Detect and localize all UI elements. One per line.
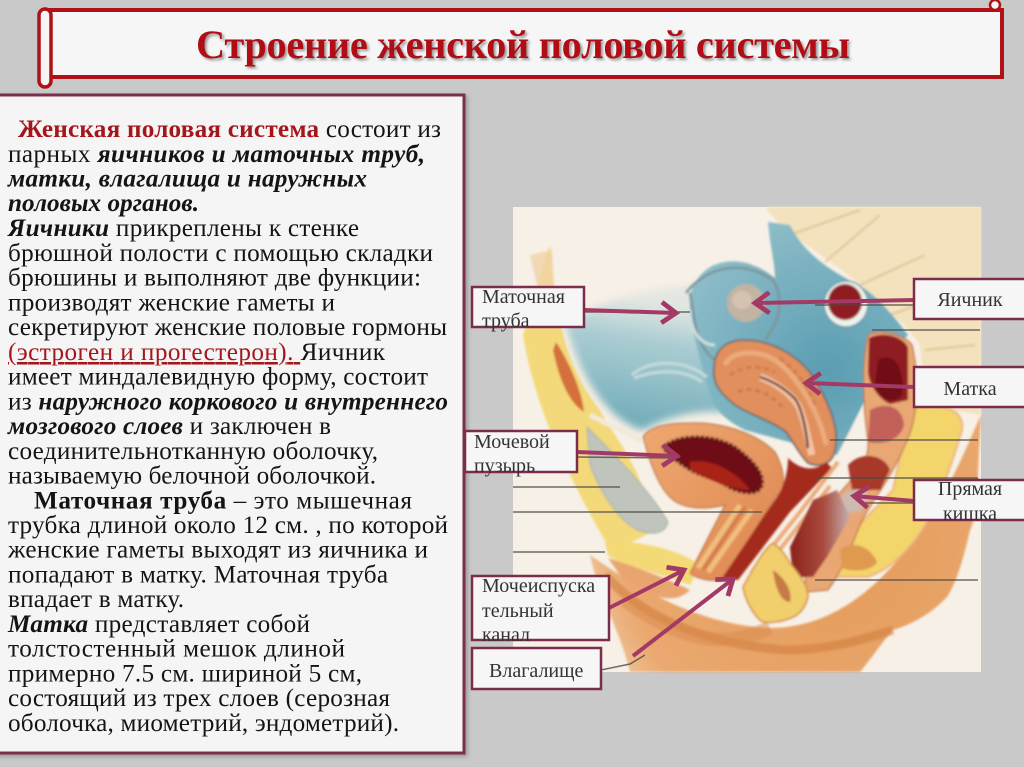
label: ovary	[914, 279, 1024, 319]
urethra and bladder outer	[643, 423, 783, 581]
back bones	[765, 207, 981, 415]
label: bladder	[465, 431, 577, 477]
uterine cavity	[760, 377, 812, 455]
label: vagina	[472, 648, 601, 689]
label: urethra: тельный	[482, 600, 554, 622]
label: urethra	[472, 575, 609, 646]
label: uterus: Матка	[943, 378, 997, 400]
label: ovary: Яичник	[937, 289, 1003, 311]
text block: fallopian tube: попадают в матку. Маточная труба	[8, 562, 388, 588]
text block: female reproductive system and ovaries: половых органов.	[8, 190, 199, 217]
cervix and vagina	[722, 458, 832, 580]
anal canal	[790, 490, 850, 577]
label: bladder: пузырь	[474, 455, 535, 477]
text block: uterus: толстостенный мешок длиной	[8, 636, 345, 662]
text block: female reproductive system and ovaries: производят женские гаметы и	[8, 290, 335, 316]
label: rectum: Прямая	[938, 478, 1002, 500]
anatomical illustration	[513, 207, 981, 672]
text block: uterus: примерно 7.5 см. шириной 5 см,	[8, 660, 362, 688]
arrow: uterus	[806, 383, 914, 387]
arrow: bladder	[577, 452, 677, 456]
bladder lumen	[663, 437, 762, 493]
label: bladder: Мочевой	[474, 431, 550, 453]
text block: female reproductive system and ovaries: (эстроген и прогестерон). Яичник	[8, 339, 386, 366]
text block: female reproductive system and ovaries: матки, влагалища и наружных	[7, 166, 367, 192]
pelvic floor fold	[605, 542, 700, 585]
text block: uterus: оболочка, миометрий, эндометрий).	[8, 710, 399, 737]
text block: fallopian tube: трубка длиной около 12 см. , по которой	[8, 512, 448, 539]
rounded fold ring	[824, 281, 868, 327]
text block: female reproductive system and ovaries	[7, 116, 448, 490]
blue peritoneum	[690, 222, 908, 455]
arrow: vagina	[633, 579, 733, 656]
text block: female reproductive system and ovaries: Яичники прикреплены к стенке	[7, 215, 359, 242]
text block: female reproductive system and ovaries: мозгового слоев и заключен в	[7, 413, 331, 440]
arrow: rectum	[854, 496, 914, 501]
pubic bone	[587, 427, 668, 533]
labia	[743, 543, 808, 622]
text block: uterus: состоящий из трех слоев (серозная	[8, 685, 390, 712]
label: vagina: Влагалище	[489, 660, 584, 682]
text block: female reproductive system and ovaries: Женская половая система состоит из	[18, 116, 441, 143]
text block: fallopian tube	[7, 488, 448, 613]
text block: female reproductive system and ovaries: парных яичников и маточных труб,	[8, 141, 425, 168]
left abdominal wall fat	[523, 245, 655, 553]
text block: female reproductive system and ovaries: соединительнотканную оболочку,	[8, 438, 378, 465]
text block: female reproductive system and ovaries: называемую белочной оболочкой.	[8, 462, 376, 490]
label: rectum	[914, 478, 1024, 525]
ovary with cover	[727, 284, 765, 322]
text block: female reproductive system and ovaries: секретируют женские половые гормоны	[8, 314, 447, 341]
arrow: ovary	[755, 300, 914, 303]
text block: uterus: Матка представляет собой	[7, 611, 310, 638]
rectum upper	[805, 332, 917, 592]
label: fallopian tube	[472, 286, 584, 332]
label: rectum: кишка	[943, 503, 997, 525]
arrow: urethra	[609, 570, 684, 608]
text block: fallopian tube: женские гаметы выходят из яичника и	[7, 536, 428, 564]
label: urethra: канал	[482, 624, 530, 646]
text block: female reproductive system and ovaries: из наружного коркового и внутреннего	[8, 388, 448, 416]
text block: fallopian tube: впадает в матку.	[8, 586, 184, 613]
text block: female reproductive system and ovaries: брюшной полости с помощью складки	[8, 240, 433, 267]
label: fallopian tube: Маточная	[482, 286, 565, 308]
urethral canal	[698, 505, 752, 572]
panel: text description	[0, 95, 464, 753]
title: Строение женской половой системы	[196, 22, 850, 67]
label: uterus	[914, 367, 1024, 407]
text block: female reproductive system and ovaries: имеет миндалевидную форму, состоит	[8, 364, 428, 390]
blue cavity left part	[566, 285, 725, 430]
arrow: fallopian tube	[584, 310, 676, 313]
uterus outer	[714, 340, 836, 465]
rectum lower	[842, 490, 868, 512]
right fat band	[827, 407, 962, 577]
lower body tissue	[590, 415, 981, 672]
text block: fallopian tube: Маточная труба – это мышечная	[34, 488, 412, 514]
right lower fat inner	[840, 545, 877, 570]
label: fallopian tube: труба	[482, 310, 530, 332]
pointer lines	[513, 305, 980, 670]
title banner	[39, 0, 1002, 87]
text block: uterus	[7, 611, 399, 737]
rectum lumen upper	[868, 335, 908, 404]
label: urethra: Мочеиспуска	[482, 575, 595, 597]
text block: female reproductive system and ovaries: брюшины и выполняют две функции:	[8, 264, 421, 292]
